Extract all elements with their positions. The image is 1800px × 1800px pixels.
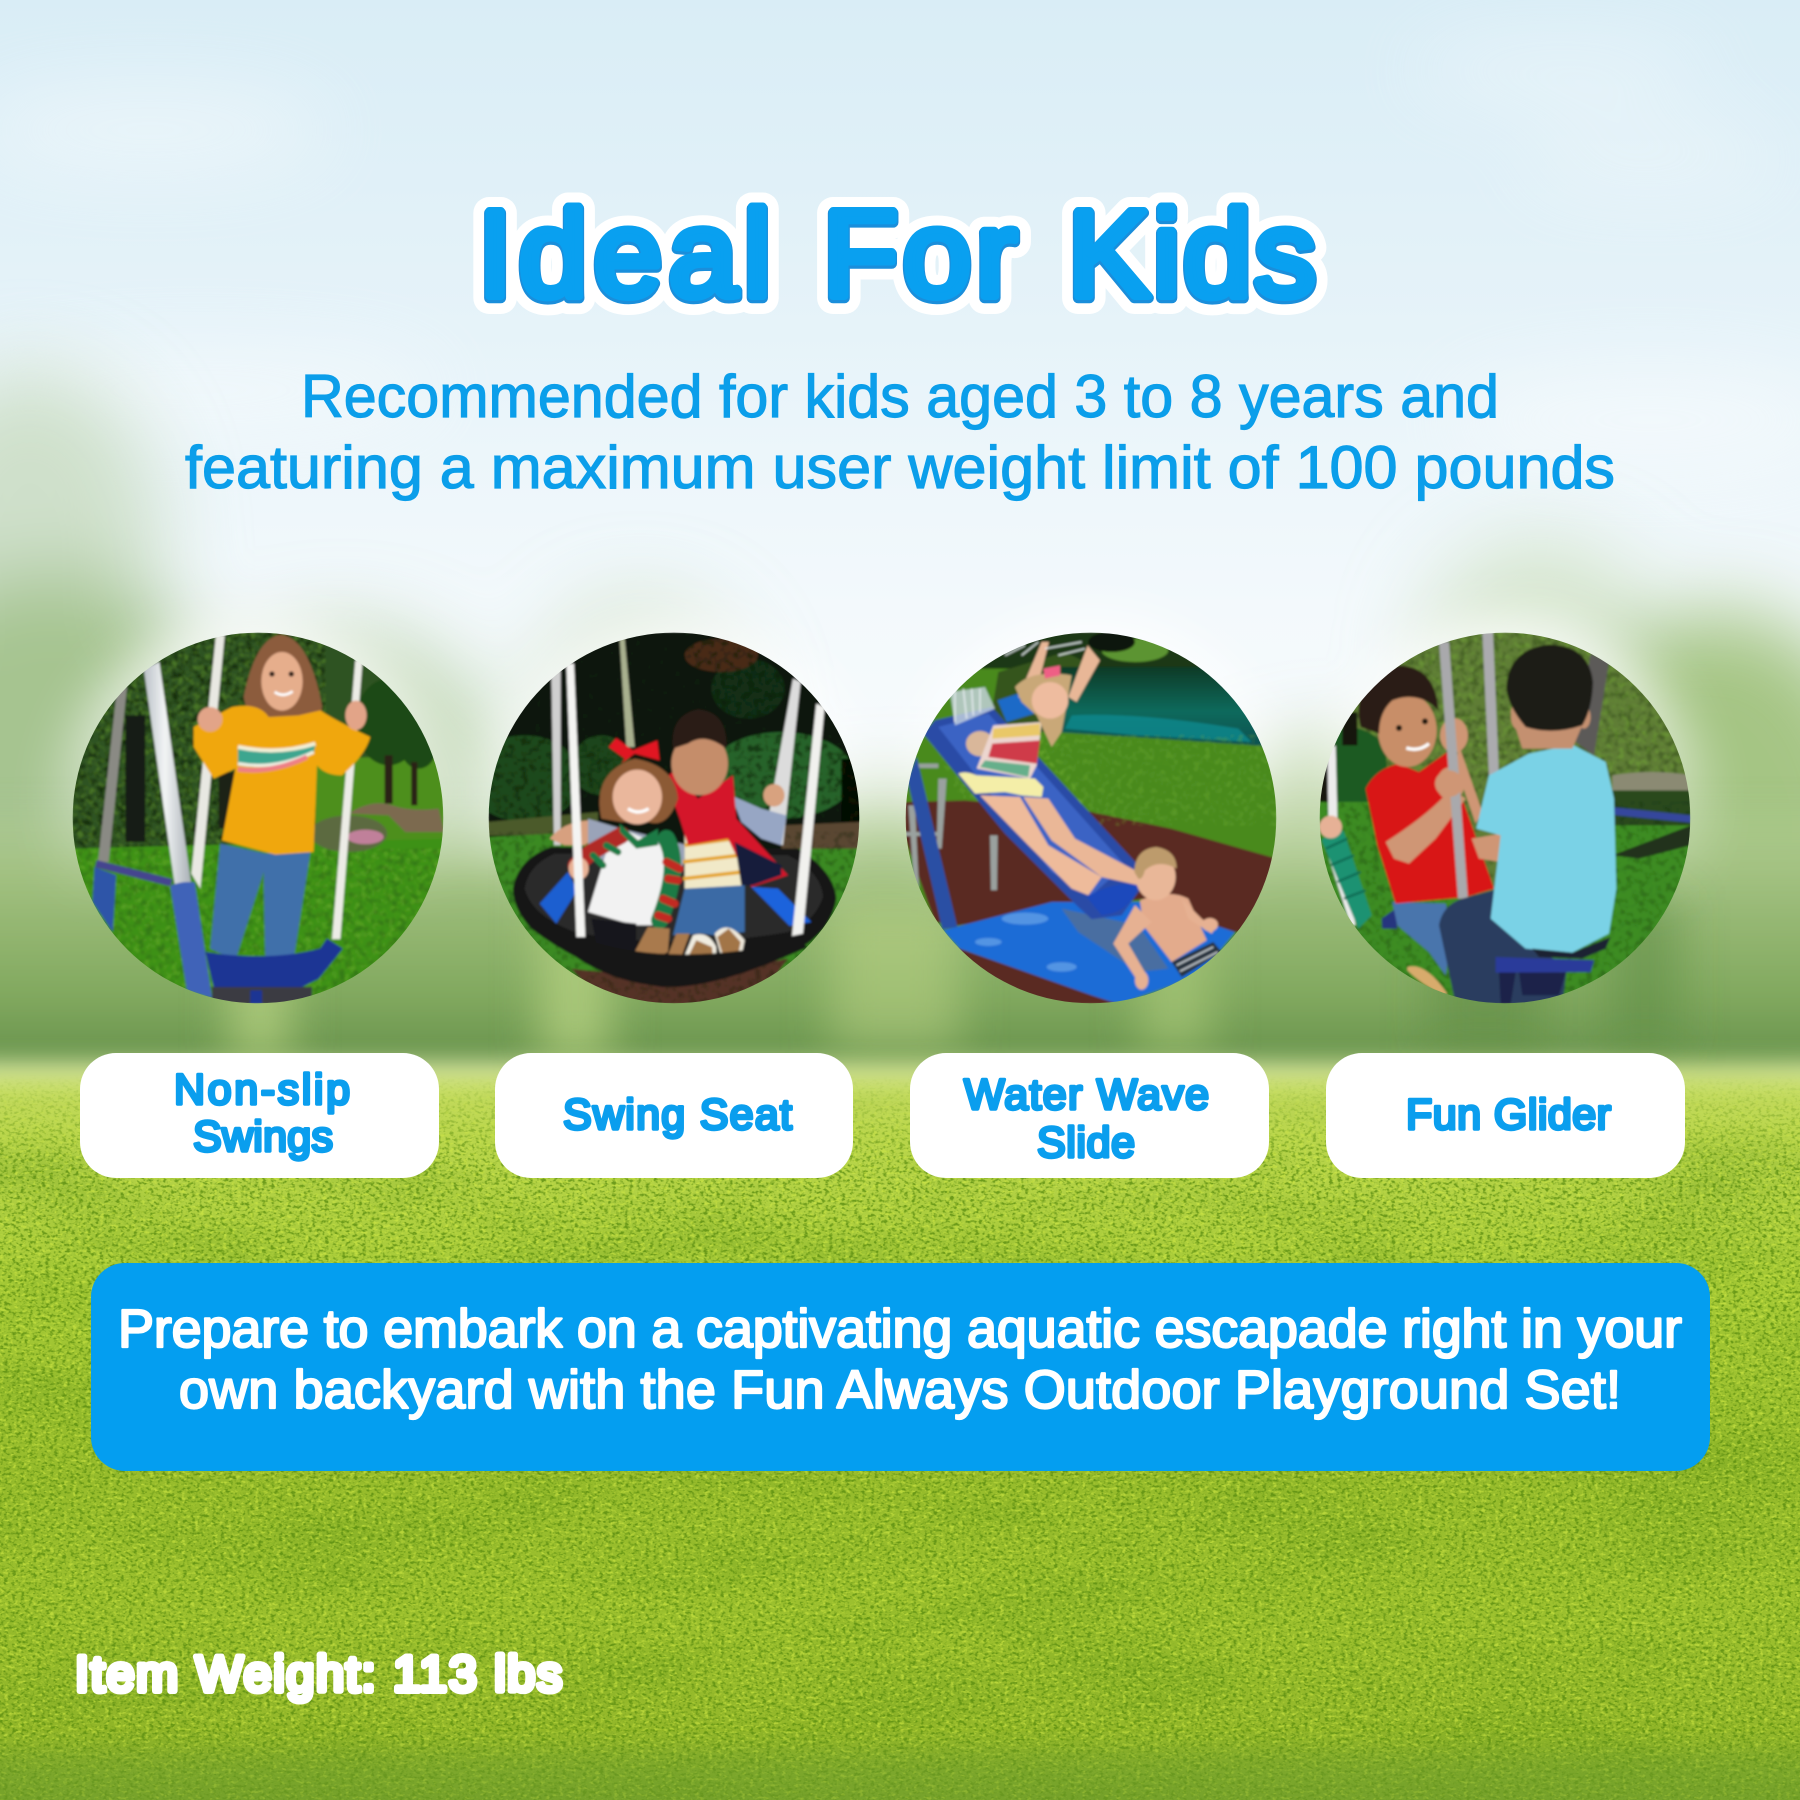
title: Ideal For Kids: Kids [1068,188,1316,325]
title: Ideal For Kids: Ideal [478,188,771,325]
callout banner: aquatic escapade [91,1263,1710,1471]
label: Fun Glider [1326,1053,1685,1178]
title: Ideal For Kids: For [823,186,1017,323]
label: Non-slip Swings: Non-slip [174,1066,350,1114]
label: Water Wave Slide: Water Wave [964,1071,1209,1119]
label: Water Wave Slide: Slide [1037,1119,1135,1167]
photo: two kids on round swing seat [468,632,861,1004]
title: Ideal For Kids: Kids [1068,188,1316,325]
callout banner: aquatic escapade: own backyard with the Fun Always Outdoor Playground Set! [179,1360,1621,1420]
subtitle: recommended age and weight limit: Recommended for kids aged 3 to 8 years and [301,363,1499,430]
photo: two boys on fun glider [1319,632,1691,1004]
label: Swing Seat [495,1053,853,1178]
label: Non-slip Swings: Swings [193,1113,333,1161]
photo: kids on water wave slide [905,632,1277,1004]
title: Ideal For Kids: For [823,188,1017,325]
label: Water Wave Slide [910,1053,1269,1178]
subtitle: recommended age and weight limit [185,363,1615,501]
item weight note: Item Weight: 113 lbs [75,1646,562,1702]
title: Ideal For Kids: Kids [1068,186,1316,323]
title: Ideal For Kids [478,186,1316,325]
subtitle: recommended age and weight limit: featuring a maximum user weight limit of 100 pounds [185,434,1615,501]
photo halos [58,618,1705,1018]
title: Ideal For Kids: Ideal [478,188,771,325]
callout banner: aquatic escapade: Prepare to embark on a captivating aquatic escapade right in your [118,1299,1682,1359]
title: Ideal For Kids: Ideal [478,186,771,323]
label: Non-slip Swings [80,1053,439,1178]
title: Ideal For Kids: For [823,188,1017,325]
label: Swing Seat: Swing Seat [563,1091,792,1139]
photo: girl standing on non-slip swing [72,632,444,1004]
label: Fun Glider: Fun Glider [1406,1091,1611,1139]
